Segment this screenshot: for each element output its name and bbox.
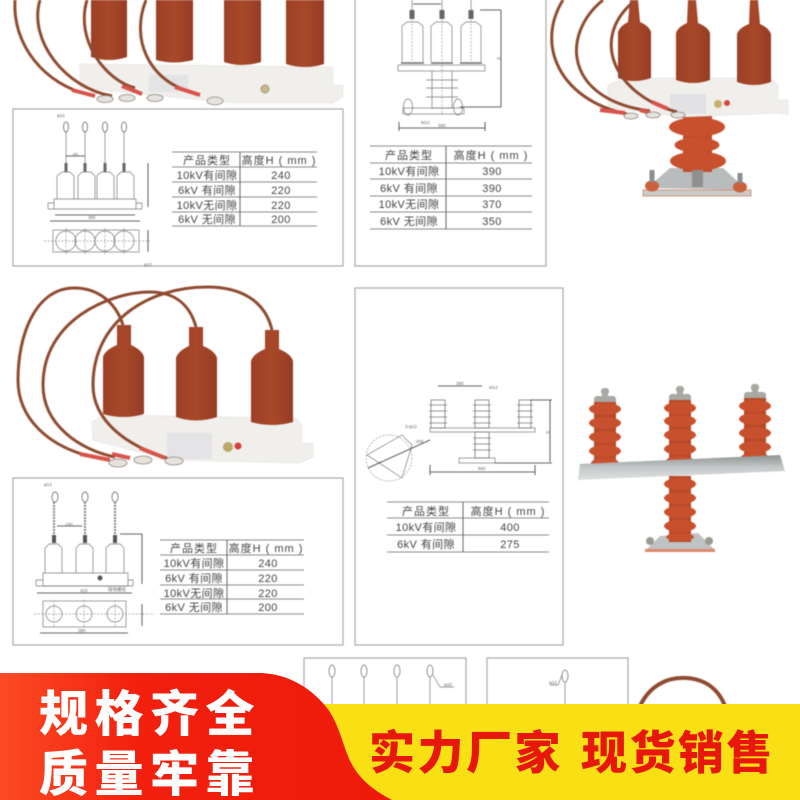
four cylinders <box>91 0 324 67</box>
spec table: 高度H ( mm ) <box>229 541 303 555</box>
spec table: 6kV 有间隙 <box>380 181 438 195</box>
spec table <box>370 146 532 229</box>
photo: four-pole surge arrester <box>15 0 343 105</box>
spec table <box>172 152 317 226</box>
three cylinders and necks <box>618 0 771 85</box>
dimension drawing <box>34 482 154 633</box>
dimension drawing: φ12 <box>144 262 152 267</box>
screw terminal <box>261 85 269 93</box>
spec table: 220 <box>271 185 291 197</box>
panel: lower drawing right (cropped): φ12 <box>549 680 557 685</box>
dimension drawing: φ12 <box>44 482 52 487</box>
spec table: 200 <box>258 602 278 614</box>
middle insulator <box>664 386 696 466</box>
slogan: factory and stock: 实力厂家 <box>369 727 563 779</box>
spec table <box>387 502 549 552</box>
spec table: 6kV 有间隙 <box>397 537 455 551</box>
spec table: 6kV 有间隙 <box>165 571 223 585</box>
slogan: ready goods: 现货销售 <box>581 727 775 779</box>
spec table: 10kV有间隙 <box>396 520 456 534</box>
spec table: 390 <box>482 183 502 195</box>
spec table: 10kV无间隙 <box>164 586 224 600</box>
spec table: 6kV 无间隙 <box>178 212 236 226</box>
dimension drawing: 660 <box>478 466 486 471</box>
panel: crossbar drawing and table <box>355 288 563 645</box>
dimension drawing: 410 <box>80 588 88 593</box>
spec table: 400 <box>500 522 520 534</box>
panel: lower drawing left (cropped): φ16 <box>444 682 452 687</box>
spec table: 10kV无间隙 <box>379 197 439 211</box>
dimension drawing: 380 <box>456 381 464 386</box>
nameplate <box>670 94 706 114</box>
panel: lower drawing left (cropped) <box>304 658 466 710</box>
spec table: 6kV 无间隙 <box>165 600 223 614</box>
photo: crossbar arrester <box>578 384 785 552</box>
panel: three-pole drawing and table <box>13 478 343 645</box>
spec table: 10kV有间隙 <box>164 556 224 570</box>
spec table: 350 <box>482 216 502 228</box>
dimension drawing: 150 <box>65 522 73 527</box>
cables and lugs <box>18 287 272 467</box>
photo: post-mounted arrester with insulator <box>552 0 788 196</box>
cables and lugs <box>552 0 685 119</box>
spec table: 200 <box>271 214 291 226</box>
cables and lugs <box>15 0 223 105</box>
dimension drawing: 3-φ12 <box>405 424 417 429</box>
spec table: 220 <box>258 573 278 585</box>
spec table: 370 <box>482 199 502 211</box>
dimension drawing <box>366 381 552 481</box>
spec table: 产品类型 <box>402 504 450 518</box>
spec table: 高度H ( mm ) <box>242 153 316 167</box>
dimension drawing: 65 <box>73 152 79 157</box>
dimension drawing: 300 <box>438 123 446 128</box>
spec table: 220 <box>271 200 291 212</box>
spec table: 高度H ( mm ) <box>454 148 528 162</box>
white mounting base <box>608 78 788 117</box>
dimension drawing: 380 <box>88 215 96 220</box>
lower insulator <box>645 476 715 552</box>
spec table: 240 <box>271 170 291 182</box>
spec table: 产品类型 <box>170 541 218 555</box>
spec table: 10kV有间隙 <box>177 168 237 182</box>
spec table <box>160 540 304 614</box>
white mounting base <box>92 415 313 463</box>
crossbar <box>578 455 785 480</box>
spec table: 390 <box>482 166 502 178</box>
lower insulator and plate <box>643 116 751 196</box>
spec table: 产品类型 <box>385 148 433 162</box>
three cylinders and necks <box>103 325 293 425</box>
nameplate <box>167 433 212 459</box>
spec table: 10kV无间隙 <box>177 198 237 212</box>
spec table: 275 <box>500 539 520 551</box>
spec table: 高度H ( mm ) <box>471 504 545 518</box>
white mounting base <box>80 64 343 103</box>
spec table: 240 <box>258 558 278 570</box>
nameplate <box>149 75 188 92</box>
dimension drawing: φ12 <box>57 113 65 118</box>
panel: post-mounted drawing and table <box>355 0 546 266</box>
photo: cable arc (cropped) <box>640 678 725 706</box>
photo: three-pole surge arrester <box>18 287 313 467</box>
dimension drawing: 380 <box>78 628 86 633</box>
left insulator <box>589 388 621 468</box>
dimension drawing: M12 <box>421 120 430 125</box>
indicators <box>714 100 722 108</box>
right insulator <box>739 384 771 461</box>
dimension drawing: 接地螺栓 <box>108 586 126 593</box>
banner: red block <box>0 673 392 800</box>
spec table: 6kV 无间隙 <box>380 214 438 228</box>
dimension drawing <box>44 113 152 267</box>
dimension drawing <box>398 0 501 131</box>
spec table: 产品类型 <box>183 153 231 167</box>
spec table: 6kV 有间隙 <box>178 183 236 197</box>
indicators <box>223 442 233 452</box>
panel: lower drawing right (cropped) <box>487 658 628 710</box>
dimension drawing: H <box>546 430 549 435</box>
dimension drawing: 200 <box>416 439 424 444</box>
slogan: full range: 规格齐全 <box>39 688 261 742</box>
dimension drawing: H <box>497 56 500 61</box>
panel: four-pole drawing and table <box>13 109 343 267</box>
spec table: 10kV有间隙 <box>379 164 439 178</box>
banner: yellow strip <box>300 704 800 800</box>
dimension drawing: M12 <box>489 385 498 390</box>
spec table: 220 <box>258 588 278 600</box>
